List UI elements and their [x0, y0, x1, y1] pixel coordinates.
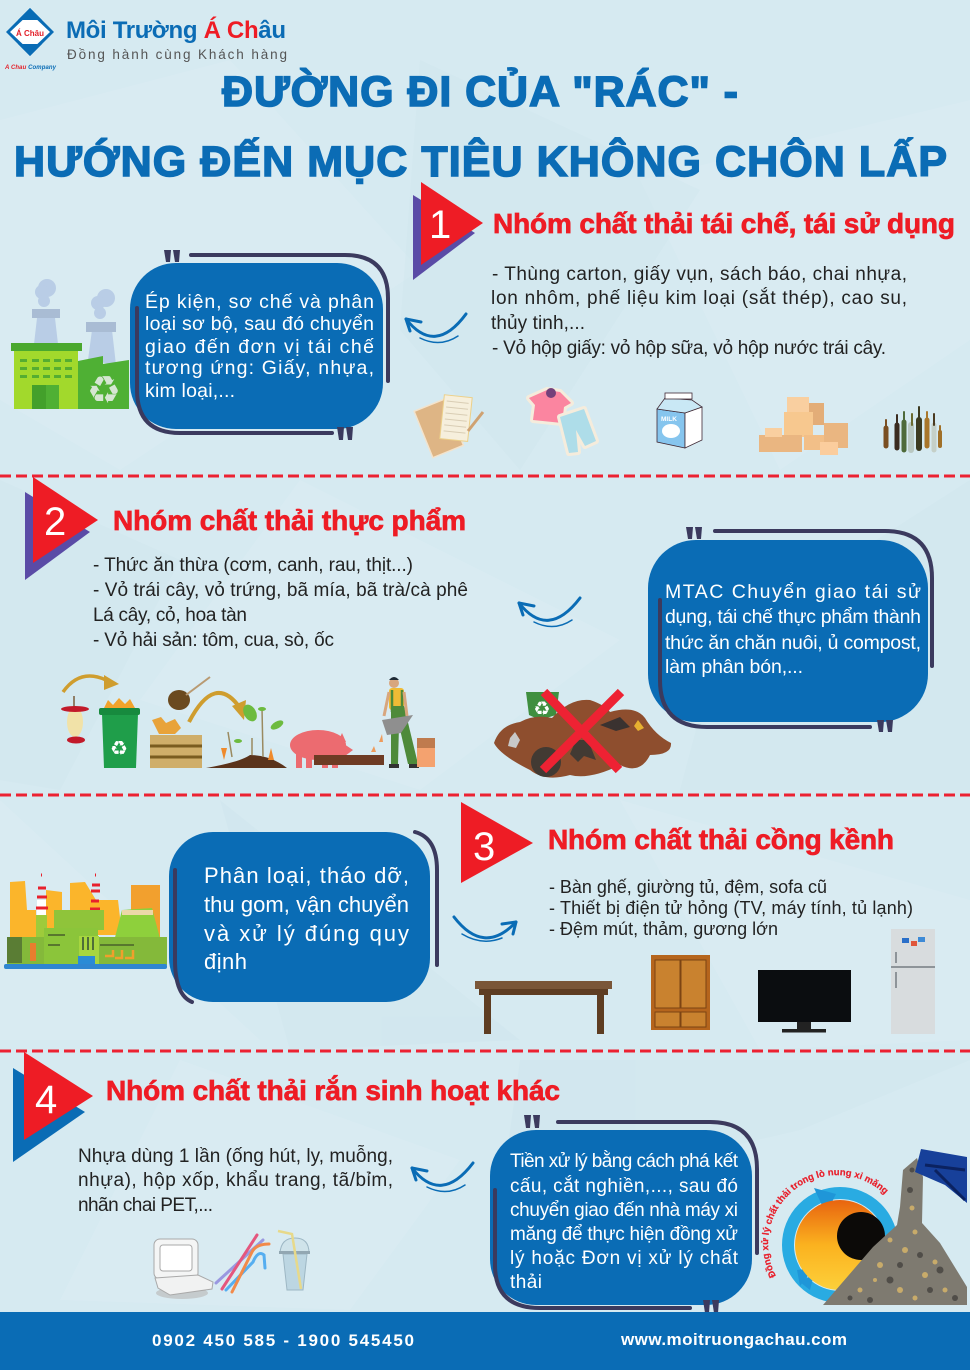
- icon: milk carton: [657, 393, 702, 448]
- callout: other waste treatment: măng để thực hiện đồng xử: [510, 1224, 738, 1245]
- badge 3: [461, 802, 533, 883]
- callout: other waste treatment: [490, 1115, 757, 1313]
- icon: farmer: [371, 677, 419, 768]
- logo diamond: Á Châu: [16, 29, 44, 38]
- icon: feed trough: [314, 755, 384, 765]
- heading 2: Nhóm chất thải thực phẩm: [113, 505, 466, 536]
- icon: plants in soil: [206, 702, 287, 768]
- text: food waste list: - Thức ăn thừa (cơm, canh, rau, thịt...): [93, 555, 413, 576]
- badge 1: [413, 182, 483, 280]
- text: bulky list: - Đệm mút, thảm, gương lớn: [549, 919, 778, 939]
- arrow: food to bin: [63, 675, 119, 692]
- footer website: www.moitruongachau.com: [620, 1330, 847, 1349]
- text: recyclable list: lon nhôm, phế liệu kim loại (sắt thép), cao su,: [491, 287, 907, 309]
- callout: recycling process: giao đến đơn vị tái chế: [145, 336, 374, 358]
- icon: recycling factory: ♻: [87, 368, 121, 412]
- text: recyclable list: - Thùng carton, giấy vụn, sách báo, chai nhựa,: [492, 264, 907, 285]
- divider 2: [0, 794, 970, 796]
- icon: foam food box: [154, 1239, 213, 1299]
- callout: recycling process: Ép kiện, sơ chế và phân: [145, 290, 374, 313]
- icon: plastic cup: [278, 1231, 310, 1290]
- icon: clothes: [529, 388, 596, 453]
- footer phone numbers: 0902 450 585 - 1900 545450: [152, 1331, 414, 1350]
- panel: section 1 recycling waste: [11, 182, 955, 458]
- badge 2: [25, 477, 98, 580]
- text: other waste list: [78, 1145, 393, 1216]
- callout: food waste treatment: dụng, tái chế thực phẩm thành: [665, 606, 921, 628]
- footer bar: [0, 1312, 970, 1370]
- panel: section 3 bulky waste: [4, 802, 935, 1034]
- panel: section 4 other solid waste: [13, 1052, 967, 1312]
- text: bulky list: [549, 877, 913, 939]
- icon: industrial plant: [4, 875, 167, 969]
- callout: other waste treatment: thải: [510, 1272, 542, 1293]
- badge 4: 4: [35, 1078, 57, 1122]
- icon: green bin: ♻: [110, 736, 128, 760]
- icon: green bin: [99, 698, 140, 768]
- heading 4: Nhóm chất thải rắn sinh hoạt khác: [106, 1075, 560, 1106]
- callout: bulky waste handling: thu gom, vận chuyển: [204, 892, 409, 917]
- title: HƯỚNG ĐẾN MỤC TIÊU KHÔNG CHÔN LẤP: [14, 137, 947, 186]
- text: recyclable list: [491, 264, 907, 359]
- callout: bulky waste handling: [169, 832, 437, 1002]
- callout: recycling process: loại sơ bộ, sau đó chuyển: [145, 313, 374, 335]
- logo caption: A Chau Company: [4, 65, 57, 71]
- badge 2: 2: [44, 500, 66, 544]
- icon: food waste to compost chain: [61, 675, 435, 768]
- icon: wardrobe: [651, 955, 710, 1030]
- title: ĐƯỜNG ĐI CỦA "RÁC" -: [222, 67, 738, 116]
- icon: apple core: [61, 696, 89, 744]
- callout: other waste treatment: Tiền xử lý bằng cách phá kết: [510, 1150, 739, 1172]
- icon: recycling factory: [11, 279, 129, 412]
- callout: recycling process: [130, 250, 388, 440]
- heading 3: Nhóm chất thải cồng kềnh: [548, 824, 894, 855]
- text: food waste list: - Vỏ hải sản: tôm, cua, sò, ốc: [93, 630, 334, 651]
- divider 3: [0, 1050, 970, 1052]
- badge 3: 3: [473, 825, 495, 869]
- icon: glass bottles: [886, 407, 940, 450]
- callout: recycling process: tương ứng: Giấy, nhựa,: [145, 357, 374, 379]
- text: bulky list: - Bàn ghế, giường tủ, đệm, sofa cũ: [549, 877, 827, 897]
- badge 4: [13, 1052, 93, 1162]
- logo: [4, 8, 287, 71]
- icon: refrigerator: [891, 929, 935, 1034]
- icon: compost crate: [150, 677, 210, 768]
- icon: crossed-out waste pile: ♻: [533, 698, 551, 720]
- title: [14, 67, 947, 186]
- text: food waste list: [93, 555, 468, 651]
- icon: feed crate: [417, 738, 435, 767]
- callout: other waste treatment: cấu, cắt nghiền,..., sau đó: [510, 1175, 738, 1197]
- callout: bulky waste handling: định: [204, 949, 247, 974]
- logo slogan: Đồng hành cùng Khách hàng: [67, 47, 287, 62]
- panel: section 2 food waste: [25, 477, 932, 778]
- icon: television: [758, 970, 851, 1032]
- callout: bulky waste handling: Phân loại, tháo dỡ,: [204, 863, 409, 888]
- arrow 4: [412, 1163, 473, 1192]
- callout: food waste treatment: MTAC Chuyển giao tái sử: [665, 581, 921, 603]
- callout: food waste treatment: thức ăn chăn nuôi, ủ compost,: [665, 632, 921, 654]
- callout: bulky waste handling: và xử lý đúng quy: [204, 921, 409, 946]
- icon: milk carton: MILK: [661, 416, 677, 423]
- text: other waste list: nhựa), hộp xốp, khẩu trang, tã/bỉm,: [78, 1170, 393, 1191]
- icon: plastic straws: [216, 1235, 269, 1292]
- icon: cement kiln co-processing: [760, 1149, 967, 1305]
- arrow 1: [406, 314, 466, 343]
- callout: other waste treatment: lý hoặc Đơn vị xử lý chất: [510, 1248, 739, 1269]
- text: other waste list: Nhựa dùng 1 lần (ống hút, ly, muỗng,: [78, 1145, 393, 1167]
- circular caption: Đồng xử lý chất thải trong lò nung xi măng: [760, 1170, 888, 1278]
- icon: cardboard boxes: [759, 397, 848, 455]
- callout: recycling process: kim loại,...: [145, 380, 235, 402]
- icon: table: [475, 981, 612, 1034]
- badge 1: 1: [429, 203, 451, 247]
- text: recyclable list: - Vỏ hộp giấy: vỏ hộp sữa, vỏ hộp nước trái cây.: [492, 338, 886, 359]
- icon: crossed-out waste pile: [494, 692, 671, 778]
- arrow 2: [519, 598, 580, 627]
- text: bulky list: - Thiết bị điện tử hỏng (TV, máy tính, tủ lạnh): [549, 898, 913, 918]
- heading 1: Nhóm chất thải tái chế, tái sử dụng: [493, 208, 955, 239]
- text: food waste list: Lá cây, cỏ, hoa tàn: [93, 605, 247, 626]
- callout: other waste treatment: chuyển giao đến nhà máy xi: [510, 1200, 738, 1221]
- arrow 3: [454, 917, 516, 941]
- icon: pig: [290, 730, 353, 768]
- text: recyclable list: thủy tinh,...: [491, 313, 585, 334]
- divider 1: [0, 474, 970, 478]
- callout: food waste treatment: làm phân bón,...: [665, 656, 803, 678]
- callout: food waste treatment: [648, 527, 932, 732]
- logo company name: Môi Trường Á Châu: [66, 16, 286, 44]
- arrow: compost to plants: [189, 693, 246, 722]
- text: food waste list: - Vỏ trái cây, vỏ trứng, bã mía, bã trà/cà phê: [93, 580, 468, 601]
- logo diamond: [6, 8, 54, 56]
- icon: notebooks: [414, 395, 483, 458]
- text: other waste list: nhãn chai PET,...: [78, 1195, 213, 1216]
